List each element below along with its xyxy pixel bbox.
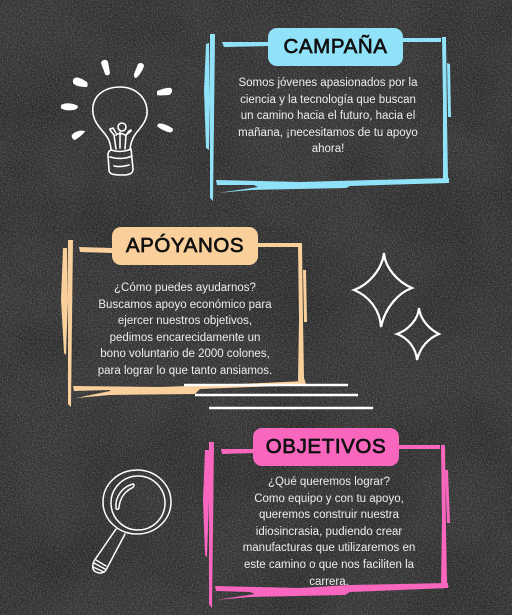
pill heading: campaña [268,28,403,66]
text block: objetivos: ¿Qué queremos lograr? [268,476,390,488]
pill heading: objetivos [253,428,399,466]
text block: campaña: ahora! [312,143,344,155]
text block: apóyanos: bono voluntario de 2000 colones, [100,348,270,360]
text block: campaña: Somos jóvenes apasionados por la [238,77,418,89]
text block: campaña: un camino hacia el futuro, hacia el [241,110,415,122]
text block: objetivos: Como equipo y con tu apoyo, [254,493,404,505]
pill heading: campaña: CAMPAÑA [283,35,388,58]
pill heading: objetivos: OBJETIVOS [266,435,386,458]
text block: apóyanos: para lograr lo que tanto ansiamos. [98,365,272,377]
text block: objetivos: manufacturas que utilizaremos en [243,542,415,554]
text block: apóyanos: ¿Cómo puedes ayudarnos? [114,282,256,294]
text block: campaña: ciencia y la tecnología que buscan [240,94,416,106]
text block: apóyanos [98,282,272,377]
text block: apóyanos: Buscamos apoyo económico para [98,299,272,311]
text block: apóyanos: pedimos encarecidamente un [110,332,260,344]
text block: objetivos: este camino o que nos faciliten la [244,559,414,571]
pill heading: apóyanos: APÓYANOS [126,234,244,257]
text block: campaña: mañana, ¡necesitamos de tu apoyo [238,127,418,139]
pill heading: apóyanos [112,227,258,265]
text block: apóyanos: ejercer nuestros objetivos, [118,315,252,327]
text block: objetivos [243,476,415,588]
text block: objetivos: carrera. [309,576,349,588]
text block: campaña [238,77,418,155]
text block: objetivos: idiosincrasia, pudiendo crear [256,526,402,538]
text block: objetivos: queremos construir nuestra [259,509,399,521]
